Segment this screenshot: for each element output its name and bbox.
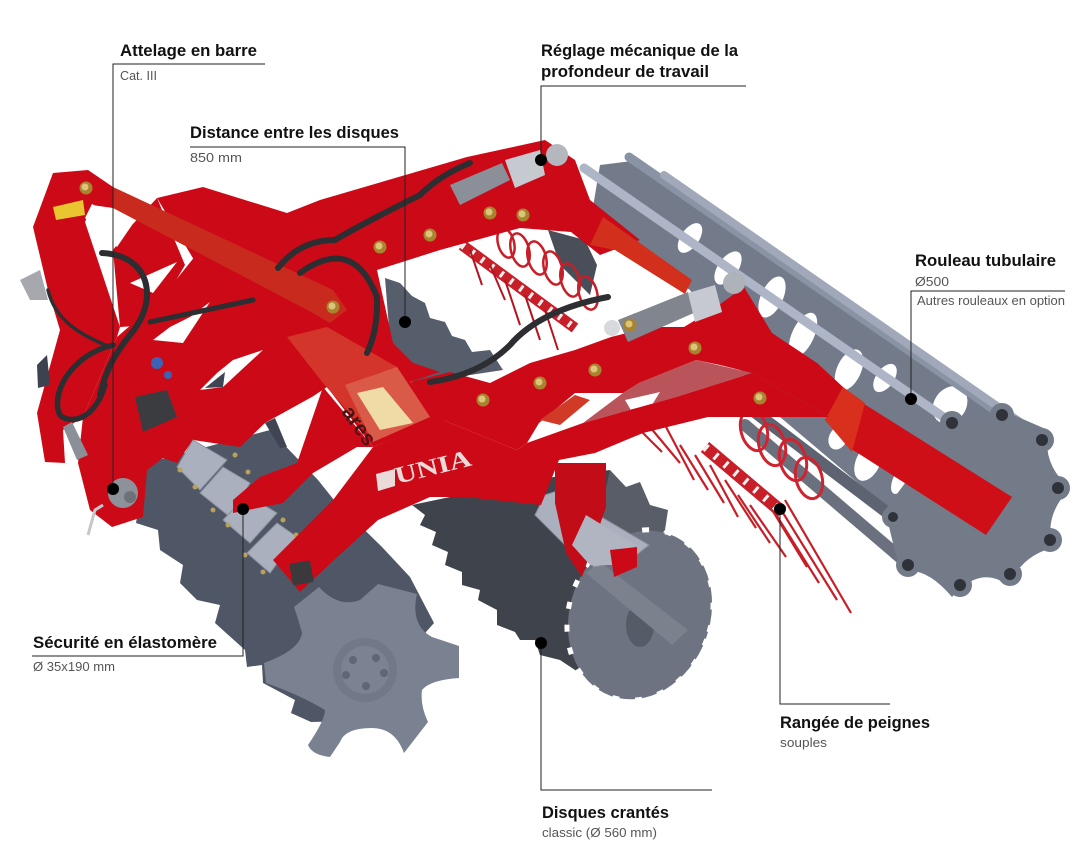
roller: tubular roller cage xyxy=(584,157,1046,565)
callout: Rouleau tubulaire: Autres rouleaux en option xyxy=(917,294,1065,308)
dark disc seen through openings xyxy=(205,372,287,448)
callout: Réglage mécanique de la profondeur de travail xyxy=(535,42,746,166)
callout: Rouleau tubulaire xyxy=(905,252,1065,405)
front left disc xyxy=(264,584,459,757)
gap between mid plate and lower plate xyxy=(583,360,752,423)
callout: Attelage en barre: Attelage en barre xyxy=(120,42,257,60)
bolts xyxy=(80,182,766,406)
callout: Distance entre les disques xyxy=(190,124,411,328)
callout: Distance entre les disques: 850 mm xyxy=(190,151,242,165)
callout: Rouleau tubulaire: Ø500 xyxy=(915,275,949,289)
hydraulic hoses xyxy=(48,163,608,420)
brand labels on frame: UNIA xyxy=(392,446,475,490)
brand labels on frame xyxy=(337,402,475,491)
front beam and UNIA plate xyxy=(113,187,829,592)
front right disc xyxy=(544,509,736,721)
callout: Sécurité en élastomère: Sécurité en élastomère xyxy=(33,634,217,652)
callout: Attelage en barre xyxy=(107,42,265,495)
brand labels on frame: ares xyxy=(337,402,381,450)
front right disc gang xyxy=(412,470,668,672)
central bracket with red block xyxy=(555,463,637,577)
callout: Réglage mécanique de la profondeur de travail: Réglage mécanique de la xyxy=(541,42,739,60)
elastomer safety blocks xyxy=(177,440,649,574)
callout: Disques crantés: classic (Ø 560 mm) xyxy=(542,826,657,840)
front left disc gang xyxy=(136,430,434,722)
callout: Rangée de peignes: souples xyxy=(780,736,827,750)
callout: Disques crantés xyxy=(535,637,712,840)
hitch details: label, block, pin xyxy=(20,200,314,586)
red frame xyxy=(33,140,1012,535)
frame openings xyxy=(85,204,590,447)
callout: Disques crantés: Disques crantés xyxy=(542,804,669,822)
spring tine row: front xyxy=(620,406,851,613)
callout: Réglage mécanique de la profondeur de travail: profondeur de travail xyxy=(541,63,709,81)
callout: Rangée de peignes: Rangée de peignes xyxy=(780,714,930,732)
spring tine row: rear xyxy=(462,226,601,350)
callout: Rangée de peignes xyxy=(774,503,930,750)
callout: Sécurité en élastomère xyxy=(32,503,249,674)
roller: end disc xyxy=(882,403,1070,597)
hydraulic cylinders xyxy=(450,144,745,342)
callout: Distance entre les disques: Distance entre les disques xyxy=(190,124,399,142)
rear disc gang xyxy=(385,230,597,385)
callout: Rouleau tubulaire: Rouleau tubulaire xyxy=(915,252,1056,270)
callout: Sécurité en élastomère: Ø 35x190 mm xyxy=(33,660,115,674)
callout: Attelage en barre: Cat. III xyxy=(120,69,157,83)
